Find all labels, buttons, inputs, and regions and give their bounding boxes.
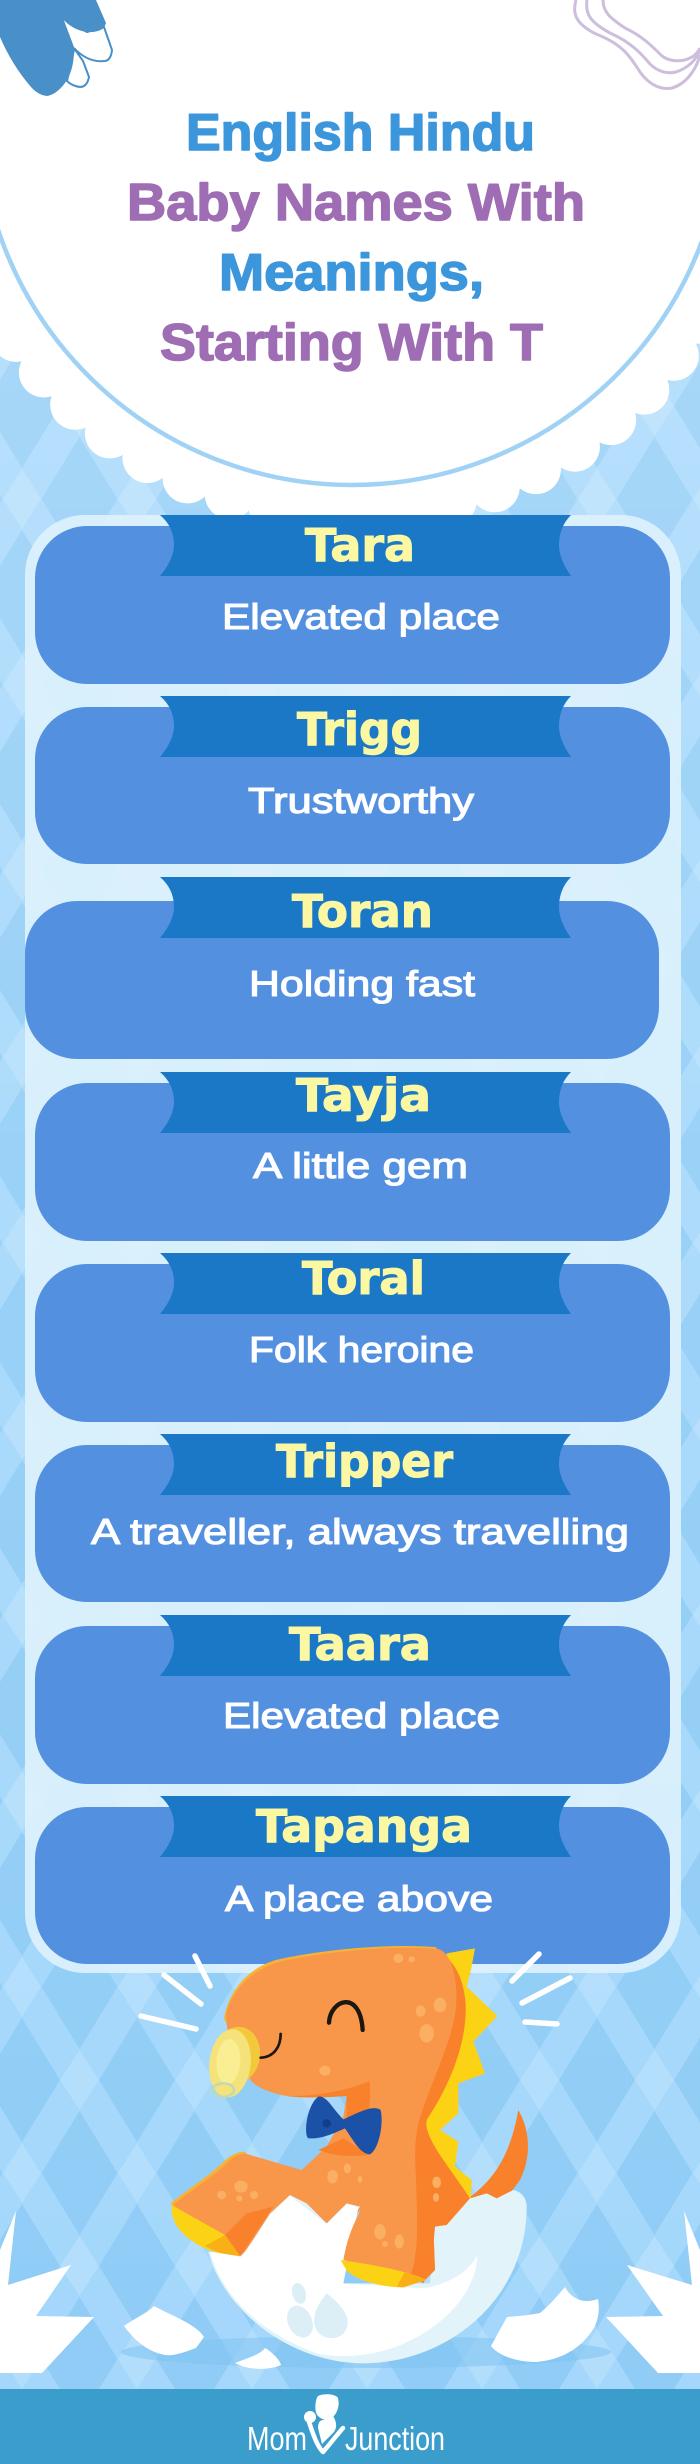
rim highlight bbox=[224, 1946, 437, 2050]
egg shadow bbox=[121, 2336, 611, 2368]
decorative white shards left and right bbox=[0, 2211, 700, 2373]
card: Tripper: A traveller, always travelling bbox=[91, 1511, 629, 1552]
title: Starting With T bbox=[160, 314, 543, 372]
egg white highlight bbox=[210, 2196, 477, 2356]
footer band bbox=[0, 2389, 700, 2464]
panel: pale backdrop behind cards bbox=[25, 515, 681, 1973]
card: Toral bbox=[35, 1252, 670, 1422]
title: Meanings, bbox=[219, 244, 484, 302]
sparkle lines around dinosaur bbox=[141, 1954, 570, 2029]
shell pieces bbox=[124, 2287, 599, 2369]
logo: MomJunction bbox=[247, 2394, 445, 2457]
card: Tapanga: A place above bbox=[225, 1878, 493, 1919]
card: Toran: Toran bbox=[292, 885, 433, 938]
card: Tara: Tara bbox=[305, 519, 415, 572]
card: Taara bbox=[35, 1615, 670, 1784]
back spikes bbox=[423, 1948, 497, 2203]
card: Trigg bbox=[35, 696, 670, 864]
arm underside shadow bbox=[225, 2207, 273, 2256]
card: Trigg: Trustworthy bbox=[248, 780, 474, 821]
card: Tayja: A little gem bbox=[253, 1145, 468, 1186]
eyes bbox=[329, 2002, 363, 2030]
card: Taara: Elevated place bbox=[223, 1695, 500, 1736]
body shadow side bbox=[363, 1948, 470, 2283]
card: Toran: Holding fast bbox=[249, 963, 475, 1004]
logo: MomJunction: Junction bbox=[345, 2420, 445, 2457]
header scalloped white circle bbox=[0, 0, 700, 513]
card: Tayja: Tayja bbox=[296, 1069, 431, 1122]
chin and neck shadow bbox=[287, 2081, 370, 2137]
card: Tara: Elevated place bbox=[222, 596, 500, 637]
card: Taara: Taara bbox=[289, 1618, 431, 1671]
head, neck and front arm bbox=[173, 1948, 456, 2257]
title: Baby Names With bbox=[127, 174, 585, 232]
card: Tapanga: Tapanga bbox=[256, 1800, 472, 1853]
card: Tripper: Tripper bbox=[276, 1435, 454, 1488]
card: Toral: Toral bbox=[302, 1252, 425, 1305]
icon: lilac wavy lines top right bbox=[575, 0, 700, 88]
title bbox=[127, 104, 585, 372]
logo: MomJunction: Mom bbox=[247, 2420, 307, 2457]
card: Tayja bbox=[35, 1069, 670, 1241]
illustration: baby dinosaur hatching from egg bbox=[171, 1946, 528, 2363]
card: Tapanga bbox=[35, 1796, 670, 1964]
arm toes bbox=[171, 2205, 240, 2256]
front leg bbox=[343, 2177, 435, 2280]
card: Tripper bbox=[35, 1434, 670, 1602]
card: Trigg: Trigg bbox=[297, 703, 422, 756]
card: Toran bbox=[25, 877, 659, 1059]
icon: blue corner ornament top left bbox=[0, 0, 112, 96]
egg shell bbox=[208, 2190, 527, 2363]
card: Toral: Folk heroine bbox=[249, 1329, 474, 1370]
skin spots bbox=[217, 1954, 446, 2249]
title: English Hindu bbox=[186, 104, 535, 162]
tail bbox=[468, 2110, 528, 2200]
logo figure: mother and baby bbox=[304, 2394, 343, 2452]
pacifier bbox=[211, 2024, 264, 2086]
egg spots bbox=[282, 2281, 348, 2342]
card: Tara bbox=[35, 515, 670, 684]
bow tie bbox=[306, 2097, 382, 2154]
